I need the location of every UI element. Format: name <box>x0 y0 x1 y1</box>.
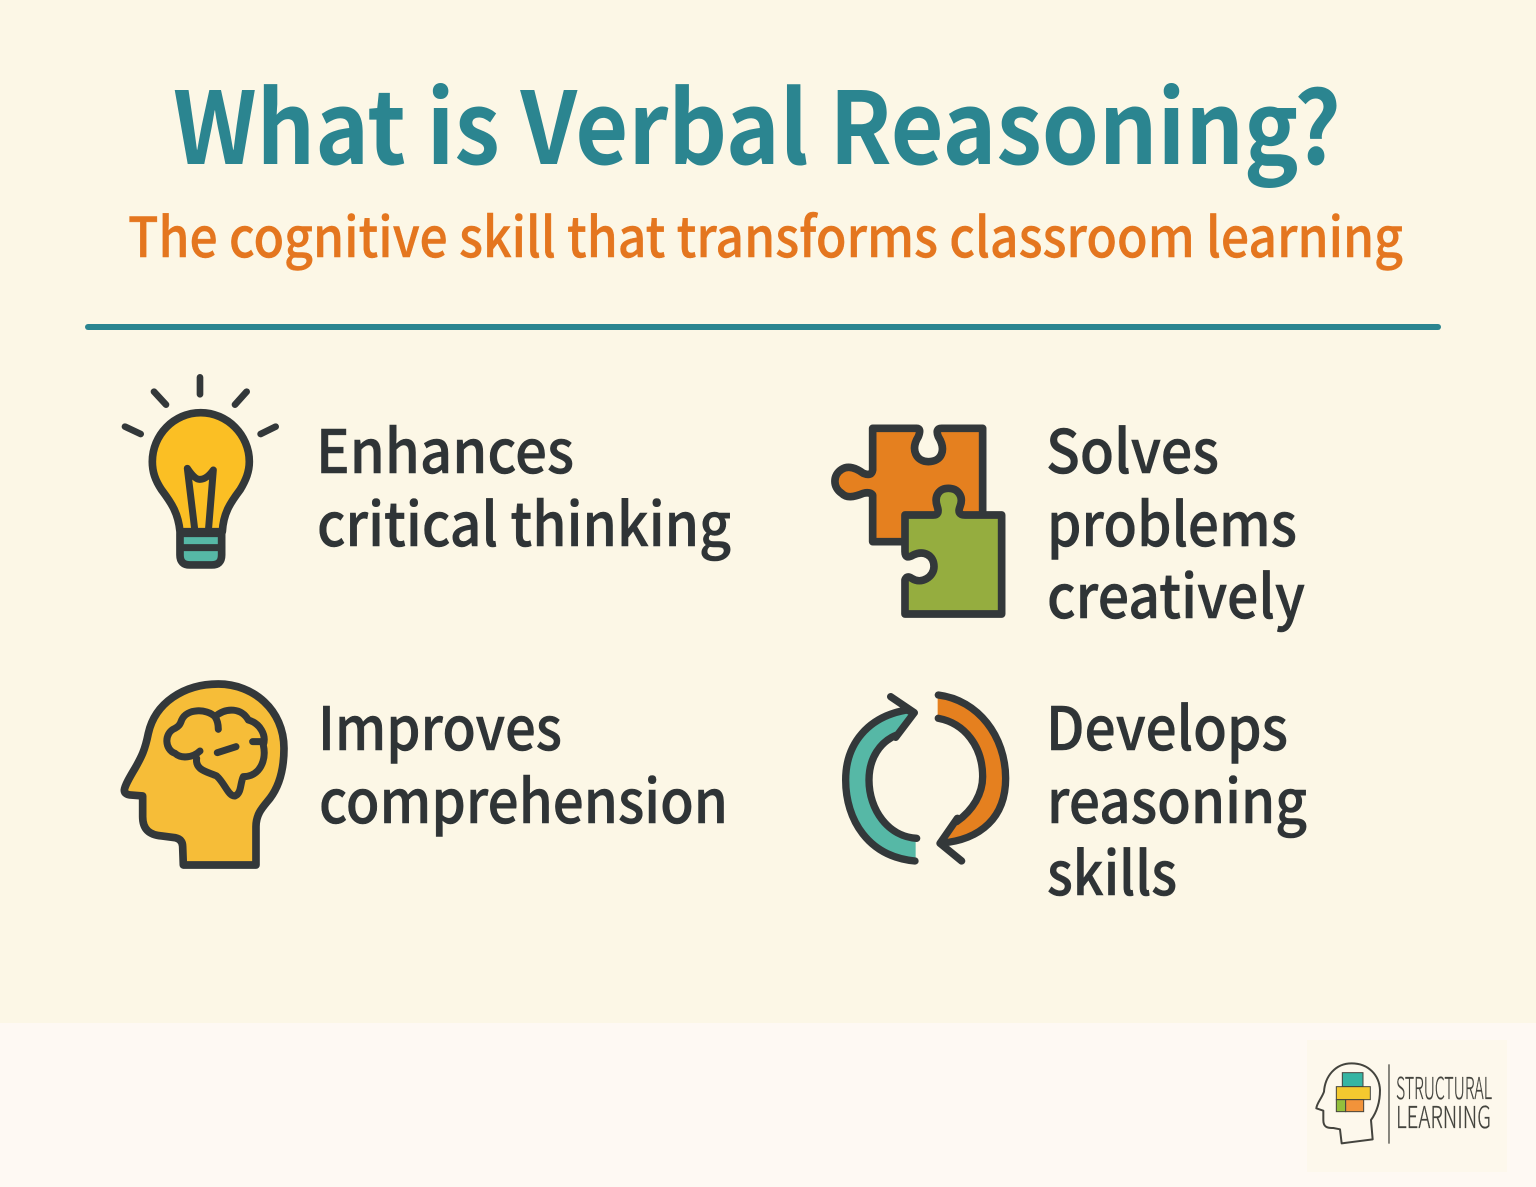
text: develops reasoning skills: reasoning <box>1047 754 1307 841</box>
text: develops reasoning skills: skills <box>1047 826 1177 913</box>
icon: logo head with blocks <box>1316 1063 1390 1144</box>
panel: problem solving <box>835 404 1305 636</box>
text: develops reasoning skills <box>1046 681 1307 913</box>
text: improves comprehension: Improves <box>318 681 562 768</box>
text: enhances critical thinking <box>316 404 731 564</box>
text: solves problems creatively: creatively <box>1047 549 1305 636</box>
text: enhances critical thinking: critical thinking <box>317 477 731 564</box>
icon: cycle arrows <box>846 695 1006 861</box>
subtitle: The cognitive skill that transforms classroom learning <box>128 193 1403 273</box>
panel: critical thinking <box>125 377 731 565</box>
logo text <box>1396 1064 1492 1137</box>
text: solves problems creatively: problems <box>1047 477 1297 564</box>
text: enhances critical thinking: Enhances <box>316 404 574 491</box>
text: develops reasoning skills: Develops <box>1046 681 1288 768</box>
title: What is Verbal Reasoning? <box>173 48 1341 193</box>
panel: comprehension <box>124 681 728 865</box>
logo text: LEARNING <box>1396 1093 1491 1137</box>
logo: Structural Learning <box>1307 1040 1507 1172</box>
icon: puzzle pieces <box>835 428 1002 614</box>
text: improves comprehension <box>318 681 728 841</box>
text: solves problems creatively: Solves <box>1046 404 1219 491</box>
panel: reasoning skills <box>846 681 1307 913</box>
icon: light bulb <box>125 377 276 565</box>
text: solves problems creatively <box>1046 404 1305 636</box>
text: improves comprehension: comprehension <box>319 754 728 841</box>
icon: head with brain <box>124 684 284 865</box>
